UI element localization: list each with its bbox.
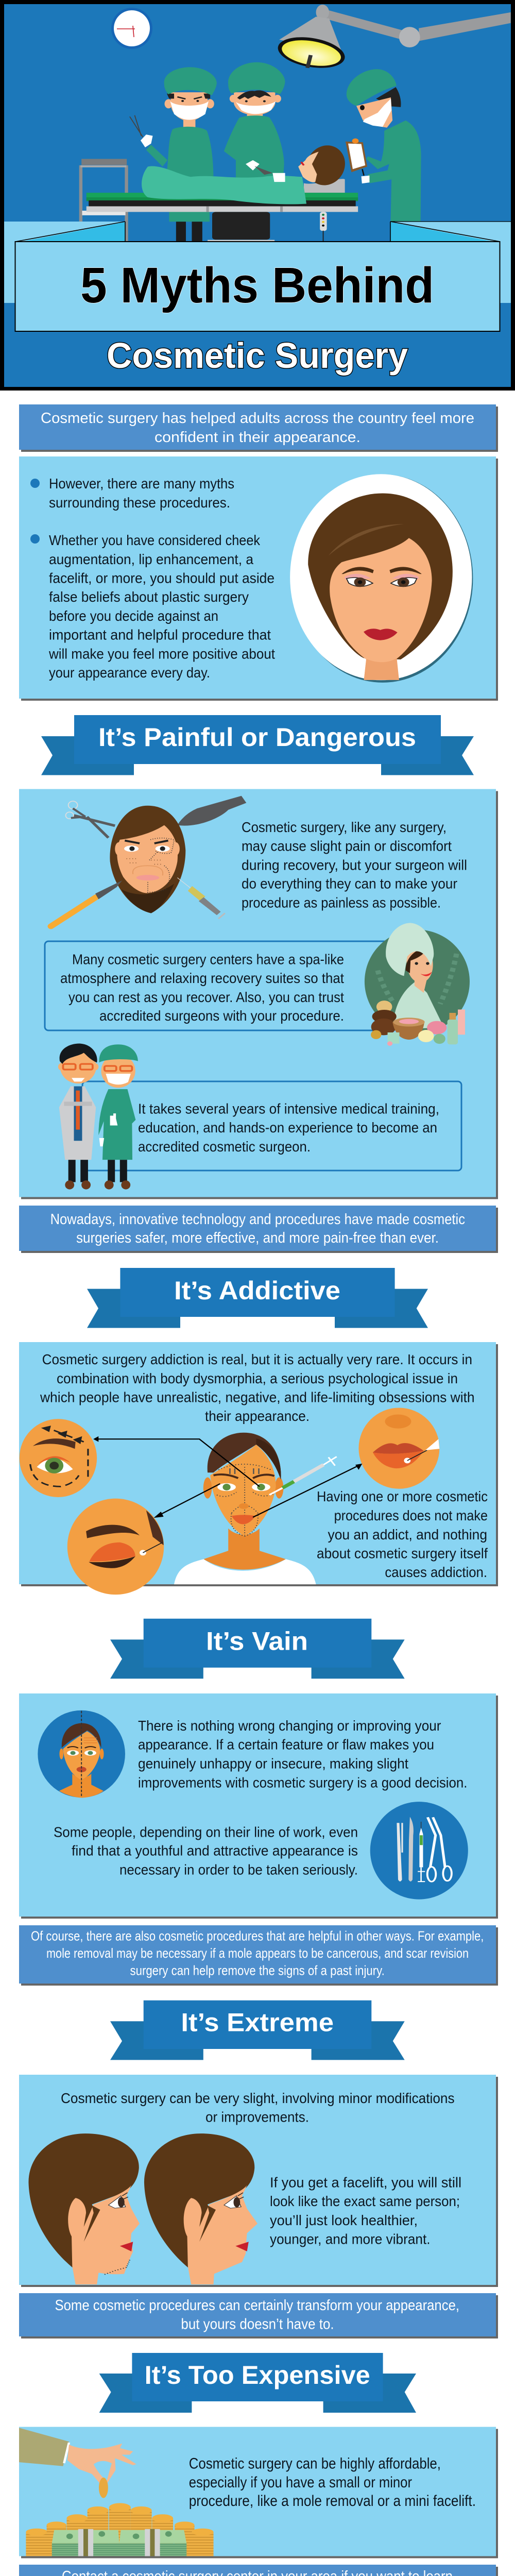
text: pain during recovery	[242, 819, 467, 911]
text: pain during recovery: may cause slight pain or discomfort	[242, 838, 452, 854]
text: affordable: Cosmetic surgery can be highly affordable,	[189, 2455, 441, 2472]
text: body dysmorphia: combination with body dysmorphia, a serious psychological issue in	[57, 1370, 458, 1386]
panel: addictive	[19, 1342, 498, 1595]
bullet list: surrounding these procedures.	[49, 495, 230, 511]
text: facelift: look like the exact same person;	[270, 2193, 460, 2209]
hand and coin	[19, 2428, 136, 2498]
callout: innovative technology	[19, 1206, 498, 1253]
text: affordable	[189, 2455, 476, 2510]
panel: intro with bullets and face	[19, 456, 498, 701]
text: line of work: necessary in order to be taken seriously.	[119, 1862, 358, 1878]
illustration: spa woman with products	[365, 923, 470, 1046]
intro callout: Cosmetic surgery has helped adults across the country feel more	[41, 410, 474, 427]
callout: helpful procedures	[19, 1925, 498, 1986]
title ribbon: main panel	[15, 242, 500, 331]
callout: transform your appearance: but yours doesn’t have to.	[181, 2316, 334, 2333]
callout: spa-like atmosphere	[45, 941, 390, 1030]
panel: vain	[19, 1693, 498, 1919]
bullet list: However, there are many myths	[49, 476, 234, 492]
coin stacks	[26, 2503, 214, 2556]
illustration: surgical team and patient	[79, 5, 511, 242]
text: nothing wrong: There is nothing wrong changing or improving your	[138, 1718, 441, 1734]
text: not an addict: causes addiction.	[385, 1564, 487, 1580]
callout: years of medical training: accredited cosmetic surgeon.	[138, 1139, 311, 1155]
cash bundles	[52, 2529, 186, 2556]
text: not an addict: about cosmetic surgery itself	[317, 1546, 488, 1562]
intro callout: confident in their appearance.	[154, 429, 360, 446]
header: operating room scene and title	[0, 0, 515, 391]
banner: It's Vain	[110, 1619, 405, 1679]
callout: transform your appearance	[19, 2293, 498, 2338]
text: slight modifications: or improvements.	[205, 2109, 309, 2125]
text: nothing wrong: improvements with cosmetic surgery is a good decision.	[138, 1774, 468, 1790]
illustration: hand dropping coin onto money	[19, 2428, 214, 2556]
callout: spa-like atmosphere: you can rest as you recover. Also, you can trust	[68, 989, 344, 1005]
icon: wall clock	[111, 8, 152, 49]
text: body dysmorphia: their appearance.	[205, 1408, 310, 1424]
banner: It's Extreme: It’s Extreme	[181, 2008, 334, 2037]
text: nothing wrong: genuinely unhappy or insecure, making slight	[138, 1756, 408, 1772]
bullet list: false beliefs about plastic surgery	[49, 589, 249, 605]
profile: after	[144, 2133, 258, 2284]
bullet list: important and helpful procedure that	[49, 627, 271, 643]
circle: eye with lift arrows	[20, 1419, 97, 1497]
callout: transform your appearance: Some cosmetic procedures can certainly transform your appearance,	[55, 2297, 459, 2314]
banner: It's Addictive	[87, 1268, 428, 1328]
text: body dysmorphia: Cosmetic surgery addiction is real, but it is actually very rare. It occurs in	[42, 1351, 472, 1367]
text: line of work	[54, 1824, 358, 1878]
text: not an addict: you an addict, and nothing	[328, 1527, 487, 1543]
icon: surgical lamp	[274, 5, 511, 73]
callout: contact a center	[19, 2565, 498, 2576]
callout: helpful procedures: surgery can help remove the signs of a past injury.	[130, 1962, 385, 1978]
banner: It's Extreme	[110, 2001, 405, 2060]
text: affordable: procedure, like a mole removal or a mini facelift.	[189, 2493, 476, 2510]
heading: Cosmetic Surgery: Cosmetic Surgery	[107, 335, 408, 376]
text: pain during recovery: do everything they can to make your	[242, 876, 457, 892]
banner: It's Vain: It’s Vain	[206, 1627, 308, 1656]
callout: spa-like atmosphere: Many cosmetic surgery centers have a spa-like	[72, 952, 344, 968]
illustration: woman's face in oval	[290, 474, 473, 683]
callout: spa-like atmosphere: atmosphere and relaxing recovery suites so that	[60, 970, 344, 986]
banner: It's Painful or Dangerous: It’s Painful or Dangerous	[98, 723, 416, 752]
bullet list: your appearance every day.	[49, 665, 210, 681]
operating table with patient	[87, 143, 358, 242]
illustration: face with surgical tools	[51, 796, 246, 926]
central face	[174, 1433, 316, 1584]
panel: painful or dangerous	[19, 789, 498, 1199]
text: facelift: younger, and more vibrant.	[270, 2231, 431, 2247]
illustration: face with zoomed procedure circles	[20, 1408, 439, 1595]
bullet list: will make you feel more positive about	[48, 646, 275, 662]
callout: innovative technology: Nowadays, innovative technology and procedures have made cosmetic	[50, 1211, 465, 1228]
surgeon: right with clipboard	[346, 69, 421, 242]
text: not an addict: Having one or more cosmetic	[317, 1488, 488, 1504]
text: facelift	[270, 2175, 461, 2247]
callout: years of medical training	[82, 1081, 461, 1171]
bullet list: facelift, or more, you should put aside	[49, 570, 274, 586]
instrument cart	[79, 159, 128, 242]
bullet list: Whether you have considered cheek	[49, 532, 261, 548]
text: nothing wrong: appearance. If a certain feature or flaw makes you	[138, 1737, 434, 1753]
bullet list	[30, 476, 275, 681]
text: pain during recovery: Cosmetic surgery, like any surgery,	[242, 819, 447, 835]
text: facelift: If you get a facelift, you will still	[270, 2175, 461, 2191]
text: pain during recovery: during recovery, but your surgeon will	[242, 857, 467, 873]
callout: years of medical training: education, and hands-on experience to become an	[138, 1120, 437, 1136]
text: slight modifications: Cosmetic surgery can be very slight, involving minor modifications	[61, 2090, 455, 2106]
circle: closed eye with injection point	[67, 1499, 164, 1595]
intro callout	[19, 404, 498, 452]
text: line of work: Some people, depending on their line of work, even	[54, 1824, 358, 1840]
illustration: before and after facelift profiles	[28, 2133, 258, 2284]
banner: It's Too Expensive	[99, 2353, 416, 2413]
panel: extreme	[19, 2075, 498, 2287]
panel: too expensive	[19, 2427, 498, 2558]
text: slight modifications	[61, 2090, 455, 2125]
callout: spa-like atmosphere: accredited surgeons with your procedure.	[99, 1008, 344, 1024]
heading: 5 Myths Behind: 5 Myths Behind	[80, 257, 434, 313]
bullet list: augmentation, lip enhancement, a	[49, 551, 253, 567]
text: not an addict	[317, 1488, 488, 1580]
illustration: half-aged face in circle	[38, 1710, 125, 1798]
icon: syringe	[269, 1456, 337, 1495]
text: line of work: find that a youthful and attractive appearance is	[72, 1842, 358, 1858]
title ribbon: folded side flaps	[4, 222, 511, 303]
text: body dysmorphia	[40, 1351, 475, 1424]
surgeon: middle with scalpel	[224, 62, 285, 179]
callout: years of medical training: It takes several years of intensive medical training,	[138, 1101, 439, 1117]
arrows from face to circles	[93, 1436, 362, 1518]
text: affordable: especially if you have a small or minor	[189, 2474, 412, 2491]
banner: It's Painful or Dangerous	[41, 715, 474, 775]
icon: surgical instruments in circle	[370, 1802, 468, 1900]
text: body dysmorphia: which people have unrealistic, negative, and life-limiting obsessions with	[40, 1389, 475, 1405]
profile: before	[28, 2133, 140, 2284]
text: not an addict: procedures does not make	[334, 1507, 488, 1523]
text: nothing wrong	[138, 1718, 468, 1790]
banner: It's Too Expensive: It’s Too Expensive	[145, 2361, 370, 2389]
text: pain during recovery: procedure as painless as possible.	[242, 895, 441, 911]
banner: It's Addictive: It’s Addictive	[174, 1276, 340, 1305]
surgeon: left with scissors	[130, 67, 217, 242]
illustration: doctor and surgeon	[58, 1044, 138, 1190]
bullet list: before you decide against an	[49, 608, 218, 624]
circle: lips with injection point	[358, 1408, 439, 1489]
text: facelift: you’ll just look healthier,	[270, 2212, 418, 2228]
callout: innovative technology: surgeries safer, more effective, and more pain-free than ever.	[76, 1230, 439, 1246]
